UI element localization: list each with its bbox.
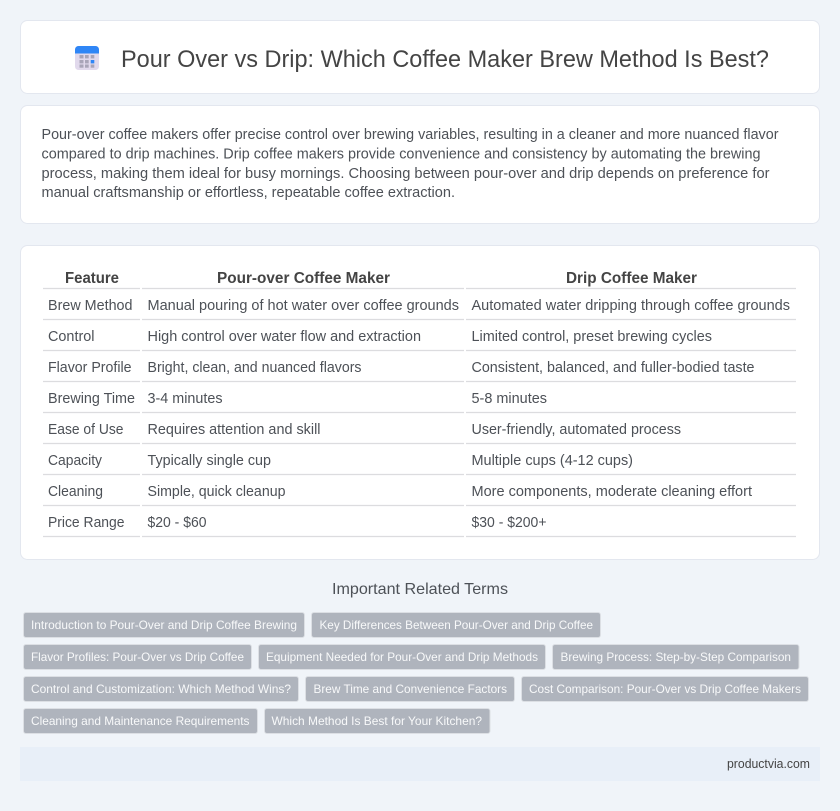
panel: comparison table [20, 246, 820, 560]
row: flavor profile: Flavor Profile [48, 360, 132, 376]
intro paragraph: Pour-over coffee makers offer precise control over brewing variables, resulting in a cleaner and more nuanced flavor [42, 127, 779, 143]
row: capacity: Multiple cups (4-12 cups) [472, 453, 633, 469]
title: Pour Over vs Drip: Which Coffee Maker Brew Method Is Best? [121, 46, 769, 73]
row: ease of use: User-friendly, automated process [472, 422, 681, 438]
row: control: High control over water flow and extraction [148, 329, 421, 345]
table header: Drip Coffee Maker [566, 270, 697, 287]
row: ease of use: Ease of Use [48, 422, 124, 438]
related term tags: Flavor Profiles: Pour-Over vs Drip Coffee [31, 650, 244, 664]
related term tags: Cleaning and Maintenance Requirements [31, 714, 250, 728]
intro paragraph: compared to drip machines. Drip coffee makers provide convenience and consistency by automating the brewing [42, 146, 761, 162]
related term tags: Equipment Needed for Pour-Over and Drip Methods [266, 650, 538, 664]
panel: intro text [20, 106, 820, 224]
row: brew method: Brew Method [48, 298, 133, 314]
row: cleaning: More components, moderate cleaning effort [472, 484, 752, 500]
intro paragraph: process, making them ideal for busy mornings. Choosing between pour-over and drip depends on preference for [42, 166, 770, 182]
related term tags [24, 612, 808, 734]
related term tags: Cost Comparison: Pour-Over vs Drip Coffee Makers [529, 682, 801, 696]
row: capacity: Capacity [48, 453, 103, 469]
row: price range: $20 - $60 [148, 515, 207, 531]
intro paragraph [42, 127, 779, 201]
related term tags: Brewing Process: Step-by-Step Comparison [560, 650, 791, 664]
row: control: Control [48, 329, 94, 345]
row: control [48, 329, 712, 345]
row: price range [48, 515, 546, 531]
footer: productvia.com [727, 757, 810, 771]
row: control: Limited control, preset brewing cycles [472, 329, 712, 345]
row: ease of use: Requires attention and skill [148, 422, 320, 438]
icon: calendar [75, 46, 99, 70]
row: brew method: Manual pouring of hot water over coffee grounds [148, 298, 459, 314]
row: flavor profile [48, 360, 755, 376]
row: brew method: Automated water dripping through coffee grounds [472, 298, 790, 314]
row: capacity: Typically single cup [148, 453, 271, 469]
row: cleaning [48, 484, 752, 500]
row: cleaning: Cleaning [48, 484, 103, 500]
row: capacity [48, 453, 633, 469]
panel: title card [20, 20, 820, 94]
row: brewing time [48, 391, 547, 407]
related term tags: Brew Time and Convenience Factors [314, 682, 507, 696]
related term tags: Introduction to Pour-Over and Drip Coffee Brewing [31, 618, 297, 632]
row: price range: $30 - $200+ [472, 515, 546, 531]
heading: related terms: Important Related Terms [332, 581, 508, 598]
row: price range: Price Range [48, 515, 125, 531]
table header [65, 270, 697, 287]
row: flavor profile: Bright, clean, and nuanced flavors [148, 360, 362, 376]
row: brewing time: Brewing Time [48, 391, 135, 407]
table header: Pour-over Coffee Maker [217, 270, 390, 287]
related term tags: Control and Customization: Which Method Wins? [31, 682, 291, 696]
row: flavor profile: Consistent, balanced, and fuller-bodied taste [472, 360, 755, 376]
footer [20, 747, 820, 781]
row: brewing time: 5-8 minutes [472, 391, 547, 407]
row: brewing time: 3-4 minutes [148, 391, 222, 407]
table header: Feature [65, 270, 119, 287]
row: cleaning: Simple, quick cleanup [148, 484, 286, 500]
table rules [43, 288, 796, 536]
intro paragraph: manual craftsmanship or effortless, repeatable coffee extraction. [42, 185, 455, 201]
related term tags: Key Differences Between Pour-Over and Drip Coffee [320, 618, 593, 632]
row: brew method [48, 298, 790, 314]
row: ease of use [48, 422, 681, 438]
related term tags: Which Method Is Best for Your Kitchen? [272, 714, 482, 728]
